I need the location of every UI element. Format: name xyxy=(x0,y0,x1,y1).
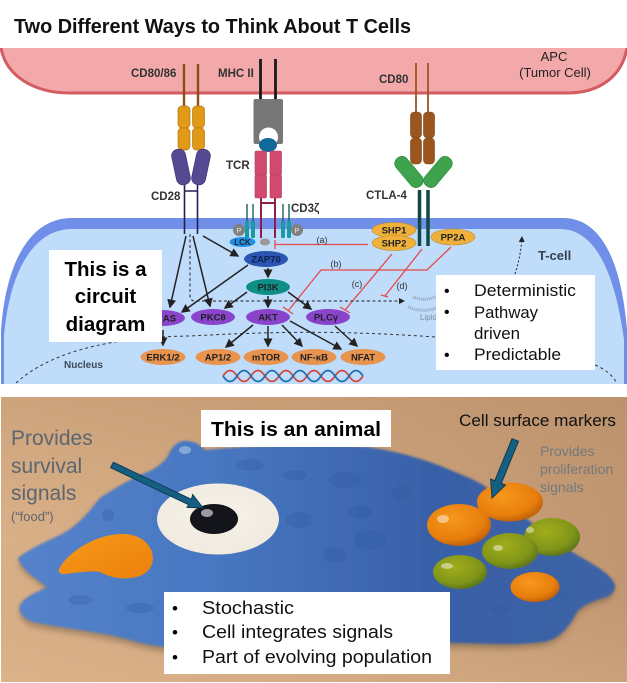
label: provides proliferation signals: Provides xyxy=(540,443,594,459)
callout: this is an animal xyxy=(201,410,391,447)
body spots xyxy=(68,459,568,615)
label: cell surface markers: Cell surface markers xyxy=(459,411,616,430)
panel: animal illustration xyxy=(1,397,627,682)
callout: stochastic list xyxy=(164,592,450,674)
label: provides survival signals: (“food”) xyxy=(11,509,54,524)
arrow to markers xyxy=(491,439,518,498)
callout: stochastic list: Cell integrates signals xyxy=(202,622,393,642)
label: lipid: Lipid xyxy=(420,313,437,322)
callout: stochastic list: • xyxy=(172,623,178,642)
label: provides proliferation signals xyxy=(540,443,613,495)
blue animal body xyxy=(18,441,615,647)
label: provides survival signals: Provides xyxy=(11,427,93,450)
nucleus boundary xyxy=(16,332,617,383)
dashed lipid pathway xyxy=(190,234,404,301)
label: CD28: CD28 xyxy=(151,191,181,203)
label: CTLA-4: CTLA-4 xyxy=(366,190,407,202)
node: PI3K: PI3K xyxy=(257,282,279,294)
node: NFAT: NFAT xyxy=(351,352,375,364)
tan background xyxy=(1,397,627,682)
node: SHP1: SHP1 xyxy=(382,226,407,236)
label: provides survival signals xyxy=(11,427,93,524)
label: CD3 zeta: CD3ζ xyxy=(291,203,320,215)
node: AKT xyxy=(246,309,290,325)
callout: this is a circuit diagram xyxy=(49,250,162,342)
title: Two Different Ways to Think About T Cells xyxy=(14,16,411,38)
DNA helix xyxy=(223,370,363,382)
node: RAS xyxy=(139,310,185,326)
blob shadow xyxy=(18,444,615,652)
inhibitory red pathways: (b) xyxy=(330,259,342,269)
node: ZAP70 xyxy=(244,251,288,267)
node: ZAP70: ZAP70 xyxy=(251,254,281,266)
callout: deterministic list: Pathway xyxy=(474,303,538,322)
receptor: TCR xyxy=(255,151,282,238)
dotted exit arrow xyxy=(515,237,522,274)
lipid raft xyxy=(408,296,437,310)
label: T-cell: T-cell xyxy=(538,248,571,263)
label: provides survival signals: survival xyxy=(11,455,82,478)
callout: deterministic list xyxy=(436,275,595,370)
callout: deterministic list: driven xyxy=(474,324,520,343)
label: nucleus: Nucleus xyxy=(64,360,103,371)
node: PLC gamma xyxy=(306,309,350,325)
panel: circuit diagram xyxy=(1,48,627,384)
label: TCR: TCR xyxy=(226,160,250,172)
CD3 zeta chains: P xyxy=(295,228,300,235)
label: CD80: CD80 xyxy=(379,74,408,86)
callout: stochastic list: • xyxy=(172,648,178,667)
node: PP2A xyxy=(431,229,475,245)
node: PKC theta xyxy=(191,309,235,325)
callout: stochastic list: Part of evolving population xyxy=(202,647,432,667)
T cell body xyxy=(1,218,627,384)
label: tumor cell: (Tumor Cell) xyxy=(519,65,591,80)
node: PKC theta: PKCθ xyxy=(200,312,226,324)
LCK kinase xyxy=(230,237,270,247)
node: NF-kB xyxy=(292,349,336,365)
CD3 zeta chains xyxy=(233,204,303,238)
receptor: CTLA-4 xyxy=(392,154,455,246)
node: PP2A: PP2A xyxy=(441,232,466,244)
node: ERK1/2: ERK1/2 xyxy=(146,352,180,364)
receptor: CD80/86 xyxy=(178,64,204,150)
callout: this is a circuit diagram: circuit xyxy=(75,285,136,308)
node: SHP2: SHP2 xyxy=(382,238,406,250)
callout: deterministic list: • xyxy=(444,283,450,300)
node: NF-kB: NF-κB xyxy=(300,352,328,364)
node: AP1/2: AP1/2 xyxy=(205,352,231,364)
callout: deterministic list: • xyxy=(444,304,450,321)
label: APC: APC xyxy=(541,49,567,64)
callout: deterministic list: • xyxy=(444,347,450,364)
node: RAS: RAS xyxy=(156,314,176,324)
node: AP1/2 xyxy=(196,349,240,365)
APC tumor cell membrane xyxy=(1,48,627,93)
node: SHP2 xyxy=(372,236,416,250)
callout: stochastic list: • xyxy=(172,599,178,618)
inhibitory red pathways xyxy=(275,235,451,314)
inhibitory red pathways: (c) xyxy=(352,279,362,289)
label: provides proliferation signals: proliferation xyxy=(540,461,613,477)
inhibitory red pathways: (d) xyxy=(396,281,408,291)
receptor: CD28 xyxy=(170,148,212,234)
label: provides proliferation signals: signals xyxy=(540,479,584,495)
callout: this is an animal: This is an animal xyxy=(211,418,381,441)
node: mTOR xyxy=(244,349,288,365)
node: PLC gamma: PLCγ xyxy=(314,312,339,324)
node: PI3K xyxy=(246,279,290,295)
callout: deterministic list: Predictable xyxy=(474,345,561,364)
eye xyxy=(157,484,279,554)
receptor: CD80 xyxy=(410,63,434,164)
signalling arrows xyxy=(163,236,357,349)
LCK kinase: LCK xyxy=(234,238,251,247)
arrow to eye xyxy=(111,462,203,508)
CD3 zeta chains: P xyxy=(237,228,242,235)
node: SHP1 xyxy=(372,222,416,238)
node: ERK1/2 xyxy=(140,349,186,365)
callout: this is a circuit diagram: This is a xyxy=(64,258,147,281)
node: NFAT xyxy=(340,349,386,365)
inhibitory red pathways: (a) xyxy=(316,235,328,245)
callout: deterministic list: Deterministic xyxy=(474,281,577,300)
callout: stochastic list: Stochastic xyxy=(202,598,294,618)
label: provides survival signals: signals xyxy=(11,482,76,505)
receptor: MHC II xyxy=(254,59,283,152)
callout: this is a circuit diagram: diagram xyxy=(66,313,145,336)
cell surface marker candies xyxy=(427,482,580,602)
body bump highlight xyxy=(179,446,191,454)
node: mTOR: mTOR xyxy=(252,352,280,364)
beak xyxy=(59,534,153,578)
node: AKT: AKT xyxy=(258,312,278,324)
label: CD80/86: CD80/86 xyxy=(131,68,176,80)
label: MHC II: MHC II xyxy=(218,68,254,80)
